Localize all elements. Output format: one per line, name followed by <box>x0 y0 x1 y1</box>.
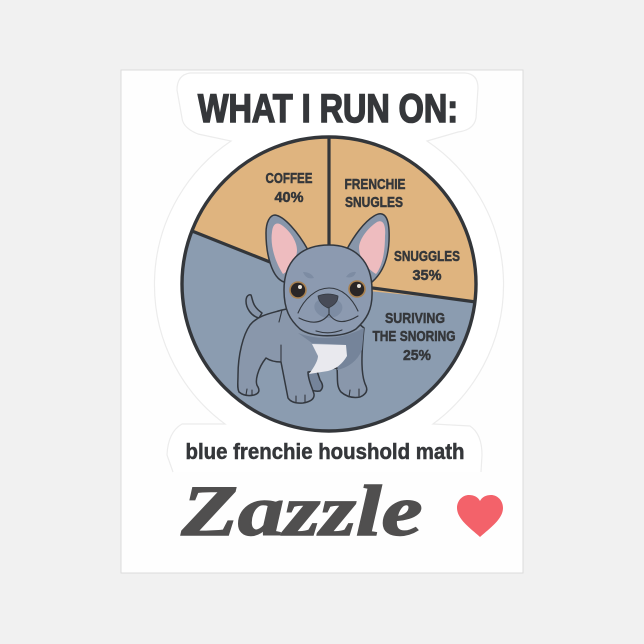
dog leg and toe lines <box>246 310 359 403</box>
dog right eye <box>349 281 365 297</box>
dog wrinkles and mouth <box>298 288 358 333</box>
label: frenchie snugles: FRENCHIE <box>344 177 406 193</box>
dog white chest patch <box>309 344 347 374</box>
subtitle: blue frenchie houshold math <box>186 439 464 464</box>
label: coffee 40%: COFFEE <box>266 171 313 187</box>
pie slice: tan coffee and snuggles <box>182 137 476 431</box>
sticker die-cut outline <box>154 73 504 472</box>
label: coffee 40%: 40% <box>274 190 304 206</box>
label: surviving the snoring 25%: THE SNORING <box>372 329 456 345</box>
label: snuggles 35%: SNUGGLES <box>394 249 460 265</box>
sheet background <box>121 70 523 573</box>
dog tail <box>246 295 262 318</box>
label: surviving the snoring 25%: SURIVING <box>385 311 445 327</box>
illustration: blue french bulldog <box>238 214 389 403</box>
pie chart <box>180 137 478 440</box>
pie slice: blue snoring <box>180 231 478 440</box>
dog left ear <box>266 215 308 282</box>
zazzle logo: Zazzle <box>180 471 422 551</box>
dog head <box>284 245 372 336</box>
dog left eye <box>290 282 306 298</box>
dog right ear <box>347 214 389 282</box>
label: coffee 40% <box>266 171 313 206</box>
label: snuggles 35% <box>394 249 460 284</box>
dog brow marks <box>303 272 356 278</box>
label: surviving the snoring 25%: 25% <box>403 348 431 364</box>
icon: heart <box>457 495 503 537</box>
dog belly shade <box>298 328 364 370</box>
pie dividers <box>192 137 476 302</box>
dog nose <box>318 294 338 308</box>
dog muzzle <box>314 298 342 318</box>
dog body <box>238 300 367 403</box>
label: frenchie snugles: SNUGLES <box>345 195 403 211</box>
label: frenchie snugles <box>344 177 406 211</box>
infographic sticker sheet <box>120 70 524 574</box>
label: surviving the snoring 25% <box>372 311 456 364</box>
dog left inner ear <box>272 224 297 274</box>
title: WHAT I RUN ON: <box>198 87 458 131</box>
dog rear far leg <box>307 368 322 391</box>
label: snuggles 35%: 35% <box>412 268 442 284</box>
dog right inner ear <box>359 221 385 274</box>
pie outer ring <box>182 137 476 431</box>
